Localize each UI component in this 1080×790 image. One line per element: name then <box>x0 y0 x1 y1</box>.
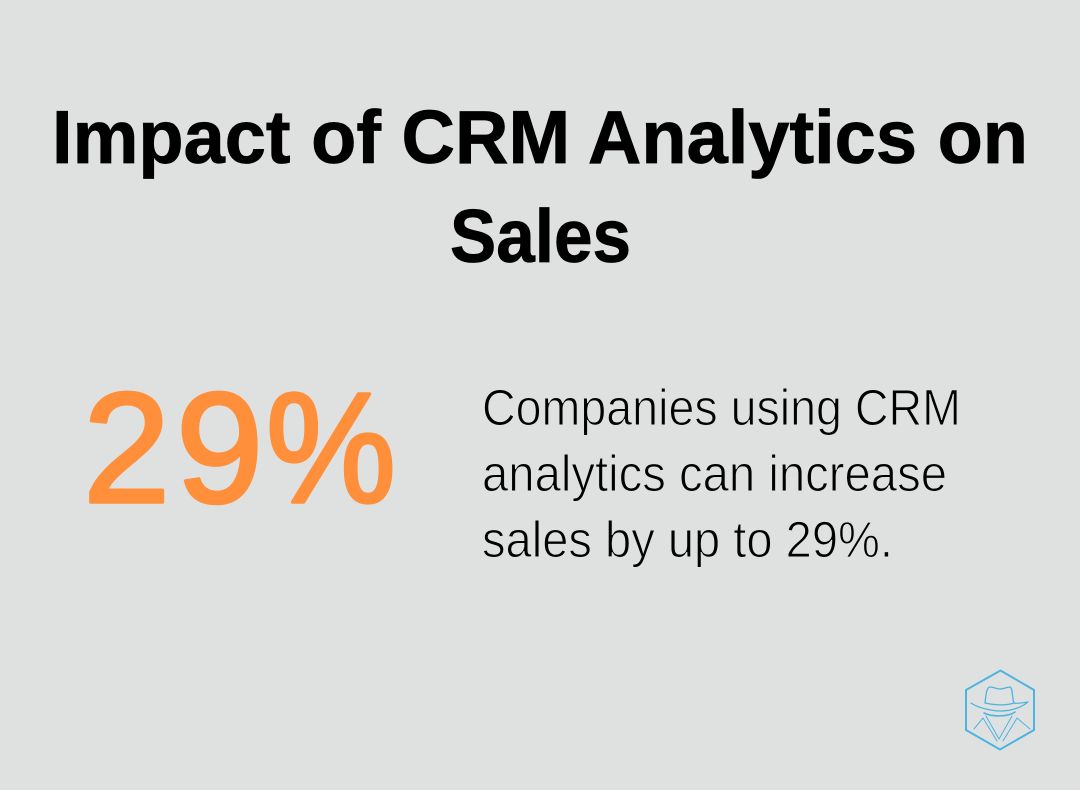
title <box>52 95 1028 278</box>
description text: sales by up to 29%. <box>482 511 893 568</box>
description text: analytics can increase <box>482 445 947 502</box>
description text <box>482 379 961 568</box>
description text: Companies using CRM <box>482 379 961 436</box>
big statistic: % <box>266 361 396 536</box>
big statistic: 9 <box>176 361 263 536</box>
big statistic: 2 <box>83 361 170 536</box>
title: Impact of CRM Analytics on <box>52 95 1028 179</box>
icon: hexagon spy logo <box>966 670 1034 750</box>
title: Sales <box>450 194 631 278</box>
